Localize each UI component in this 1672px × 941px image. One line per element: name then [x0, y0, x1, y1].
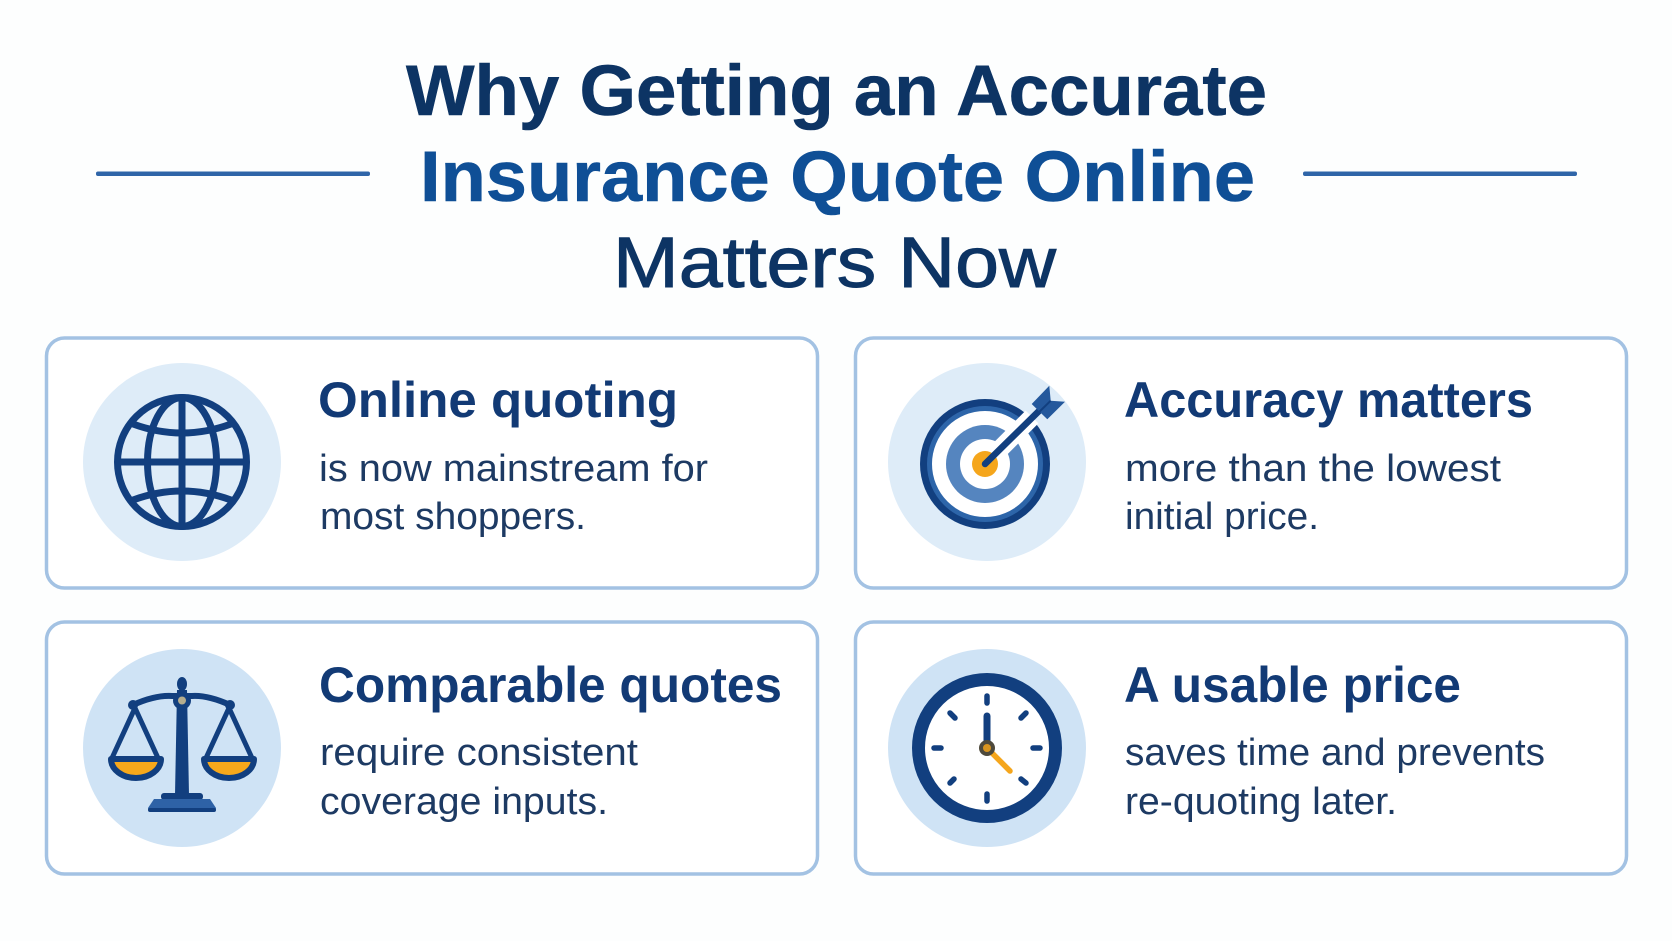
icon: target with arrow — [888, 363, 1086, 561]
body: accuracy matters: more than the lowest — [1125, 448, 1501, 490]
left title rule — [96, 172, 370, 176]
panel: usable price — [856, 622, 1626, 874]
body: accuracy matters: initial price. — [1125, 496, 1319, 538]
heading: accuracy matters: Accuracy matters — [1124, 372, 1533, 428]
icon: globe — [83, 363, 281, 561]
body: online quoting — [319, 448, 708, 538]
body: usable price: re-quoting later. — [1125, 781, 1397, 823]
body: online quoting: most shoppers. — [320, 496, 586, 538]
body: online quoting: is now mainstream for — [319, 448, 708, 490]
body: accuracy matters — [1125, 448, 1501, 538]
title — [406, 52, 1267, 303]
title: Insurance Quote Online — [420, 138, 1255, 217]
title: Matters Now — [613, 224, 1057, 303]
body: comparable quotes: coverage inputs. — [320, 781, 608, 823]
icon: clock — [888, 649, 1086, 847]
body: usable price: saves time and prevents — [1125, 732, 1545, 774]
right title rule — [1303, 172, 1577, 176]
title: Why Getting an Accurate — [406, 52, 1267, 131]
heading: usable price: A usable price — [1124, 657, 1461, 713]
panel: comparable quotes — [46, 622, 818, 874]
body: usable price — [1125, 732, 1545, 823]
heading: online quoting: Online quoting — [318, 372, 678, 428]
body: comparable quotes — [320, 732, 638, 823]
body: comparable quotes: require consistent — [320, 732, 638, 774]
panel: accuracy matters — [856, 338, 1626, 588]
panel: online quoting — [46, 338, 818, 588]
heading: comparable quotes: Comparable quotes — [319, 657, 782, 713]
icon: balance scale — [83, 649, 281, 847]
